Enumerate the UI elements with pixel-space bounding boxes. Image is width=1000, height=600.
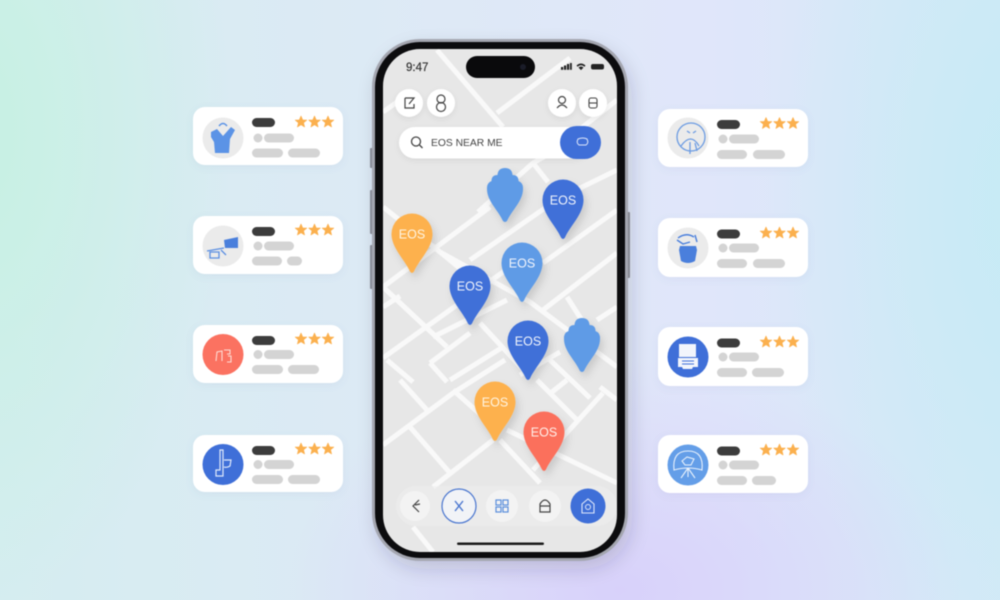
pin: light blue center [502,243,542,302]
nav button: back [400,491,430,521]
pin: dark blue center: EOS [515,334,541,348]
left card 3 [193,325,343,383]
status bar [406,56,604,78]
pin: light blue center: EOS [509,256,535,270]
search bar [399,126,601,159]
pin: orange left: EOS [399,228,425,242]
status icons [561,63,604,70]
pin: orange bottom: EOS [482,396,508,410]
pin: orange left [392,214,432,273]
time: 9:47 [406,62,428,74]
pin: orange bottom [474,382,516,441]
search icon [412,137,422,148]
pin: dark blue top right [542,180,584,239]
right card 1 [658,109,808,167]
dynamic island [466,56,535,78]
nav button: tools outlined [442,489,476,523]
map screen [383,49,617,552]
search button [560,126,601,159]
phone [370,39,630,561]
map roads [383,50,617,552]
top right button 2 [579,89,607,117]
pin: dark blue top right: EOS [550,194,576,208]
flower pin 2 [564,318,600,372]
home indicator [457,542,544,545]
search text: EOS NEAR ME [431,138,503,149]
left card 2 [193,216,343,274]
right card 2 [658,218,808,277]
nav button: bag [529,490,561,522]
top left button 1 [395,89,423,117]
bottom navigation bar [396,486,617,526]
pin: dark blue center [508,321,548,380]
right card 4 [658,435,808,493]
pin: red bottom [524,412,564,471]
pin: dark blue left: EOS [457,280,483,294]
top right button 1 [548,89,576,117]
phone frame [370,39,630,561]
nav button: grid [486,490,518,522]
top left button 2 [427,89,455,117]
flower pin 1 [487,168,523,222]
left card 4 [193,435,343,492]
pin: red bottom: EOS [531,426,557,440]
pin: dark blue left [450,266,490,325]
right card 3 [658,327,808,386]
left card 1 [193,107,343,165]
nav button: home [570,488,606,524]
